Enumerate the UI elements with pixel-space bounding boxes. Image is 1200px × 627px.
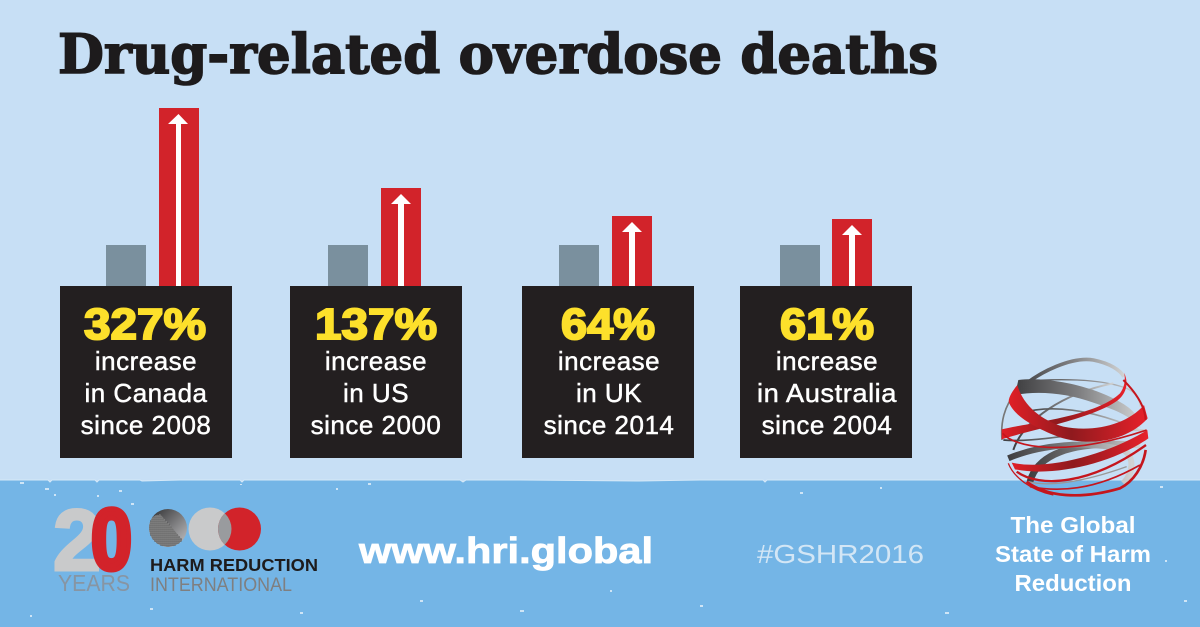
arrow xyxy=(168,114,188,286)
baseline bar xyxy=(559,245,599,286)
chart column: Australia xyxy=(740,219,912,458)
logo: 20 years xyxy=(53,492,132,596)
logo: Harm Reduction International xyxy=(149,508,318,596)
percentage: 327% xyxy=(84,300,206,349)
hashtag: #GSHR2016 xyxy=(757,539,924,569)
arrow xyxy=(391,194,411,286)
arrow xyxy=(842,225,862,286)
increase bar xyxy=(159,108,199,286)
description: since 2004 xyxy=(762,410,892,440)
baseline bar xyxy=(780,245,820,286)
stat box xyxy=(522,286,694,458)
increase bar xyxy=(832,219,872,286)
chart column: US xyxy=(290,188,462,458)
description: increase xyxy=(325,346,427,376)
baseline bar xyxy=(106,245,146,286)
increase bar xyxy=(381,188,421,286)
report name: Reduction xyxy=(1014,570,1132,596)
description: in UK xyxy=(576,378,642,408)
report name: The Global xyxy=(1010,512,1136,538)
description: in Canada xyxy=(84,378,208,408)
percentage: 61% xyxy=(780,300,874,349)
description: increase xyxy=(558,346,660,376)
description: in US xyxy=(343,378,409,408)
stat box xyxy=(60,286,232,458)
logo: 20 years: YEARS xyxy=(58,570,130,596)
chart column: Canada xyxy=(60,108,232,458)
description: increase xyxy=(95,346,197,376)
logo: Harm Reduction International: INTERNATIONAL xyxy=(150,575,292,596)
description: increase xyxy=(776,346,878,376)
icon: ribbon globe xyxy=(1002,359,1148,495)
logo: 20 years: 2 xyxy=(53,493,101,589)
description: in Australia xyxy=(757,378,897,408)
water band xyxy=(0,480,1200,627)
increase bar xyxy=(612,216,652,286)
arrow xyxy=(622,222,642,286)
chart column: UK xyxy=(522,216,694,458)
description: since 2000 xyxy=(311,410,441,440)
percentage: 137% xyxy=(315,300,437,349)
description: since 2014 xyxy=(544,410,674,440)
baseline bar xyxy=(328,245,368,286)
stat box xyxy=(740,286,912,458)
logo: 20 years: 0 xyxy=(91,492,132,588)
stat box xyxy=(290,286,462,458)
title: Drug-related overdose deaths xyxy=(58,22,938,86)
report name: State of Harm xyxy=(995,541,1151,567)
percentage: 64% xyxy=(561,300,655,349)
website address: www.hri.global xyxy=(358,530,653,571)
description: since 2008 xyxy=(81,410,211,440)
logo: Harm Reduction International: HARM REDUCTION xyxy=(150,555,318,575)
icon: three circles xyxy=(149,508,261,550)
